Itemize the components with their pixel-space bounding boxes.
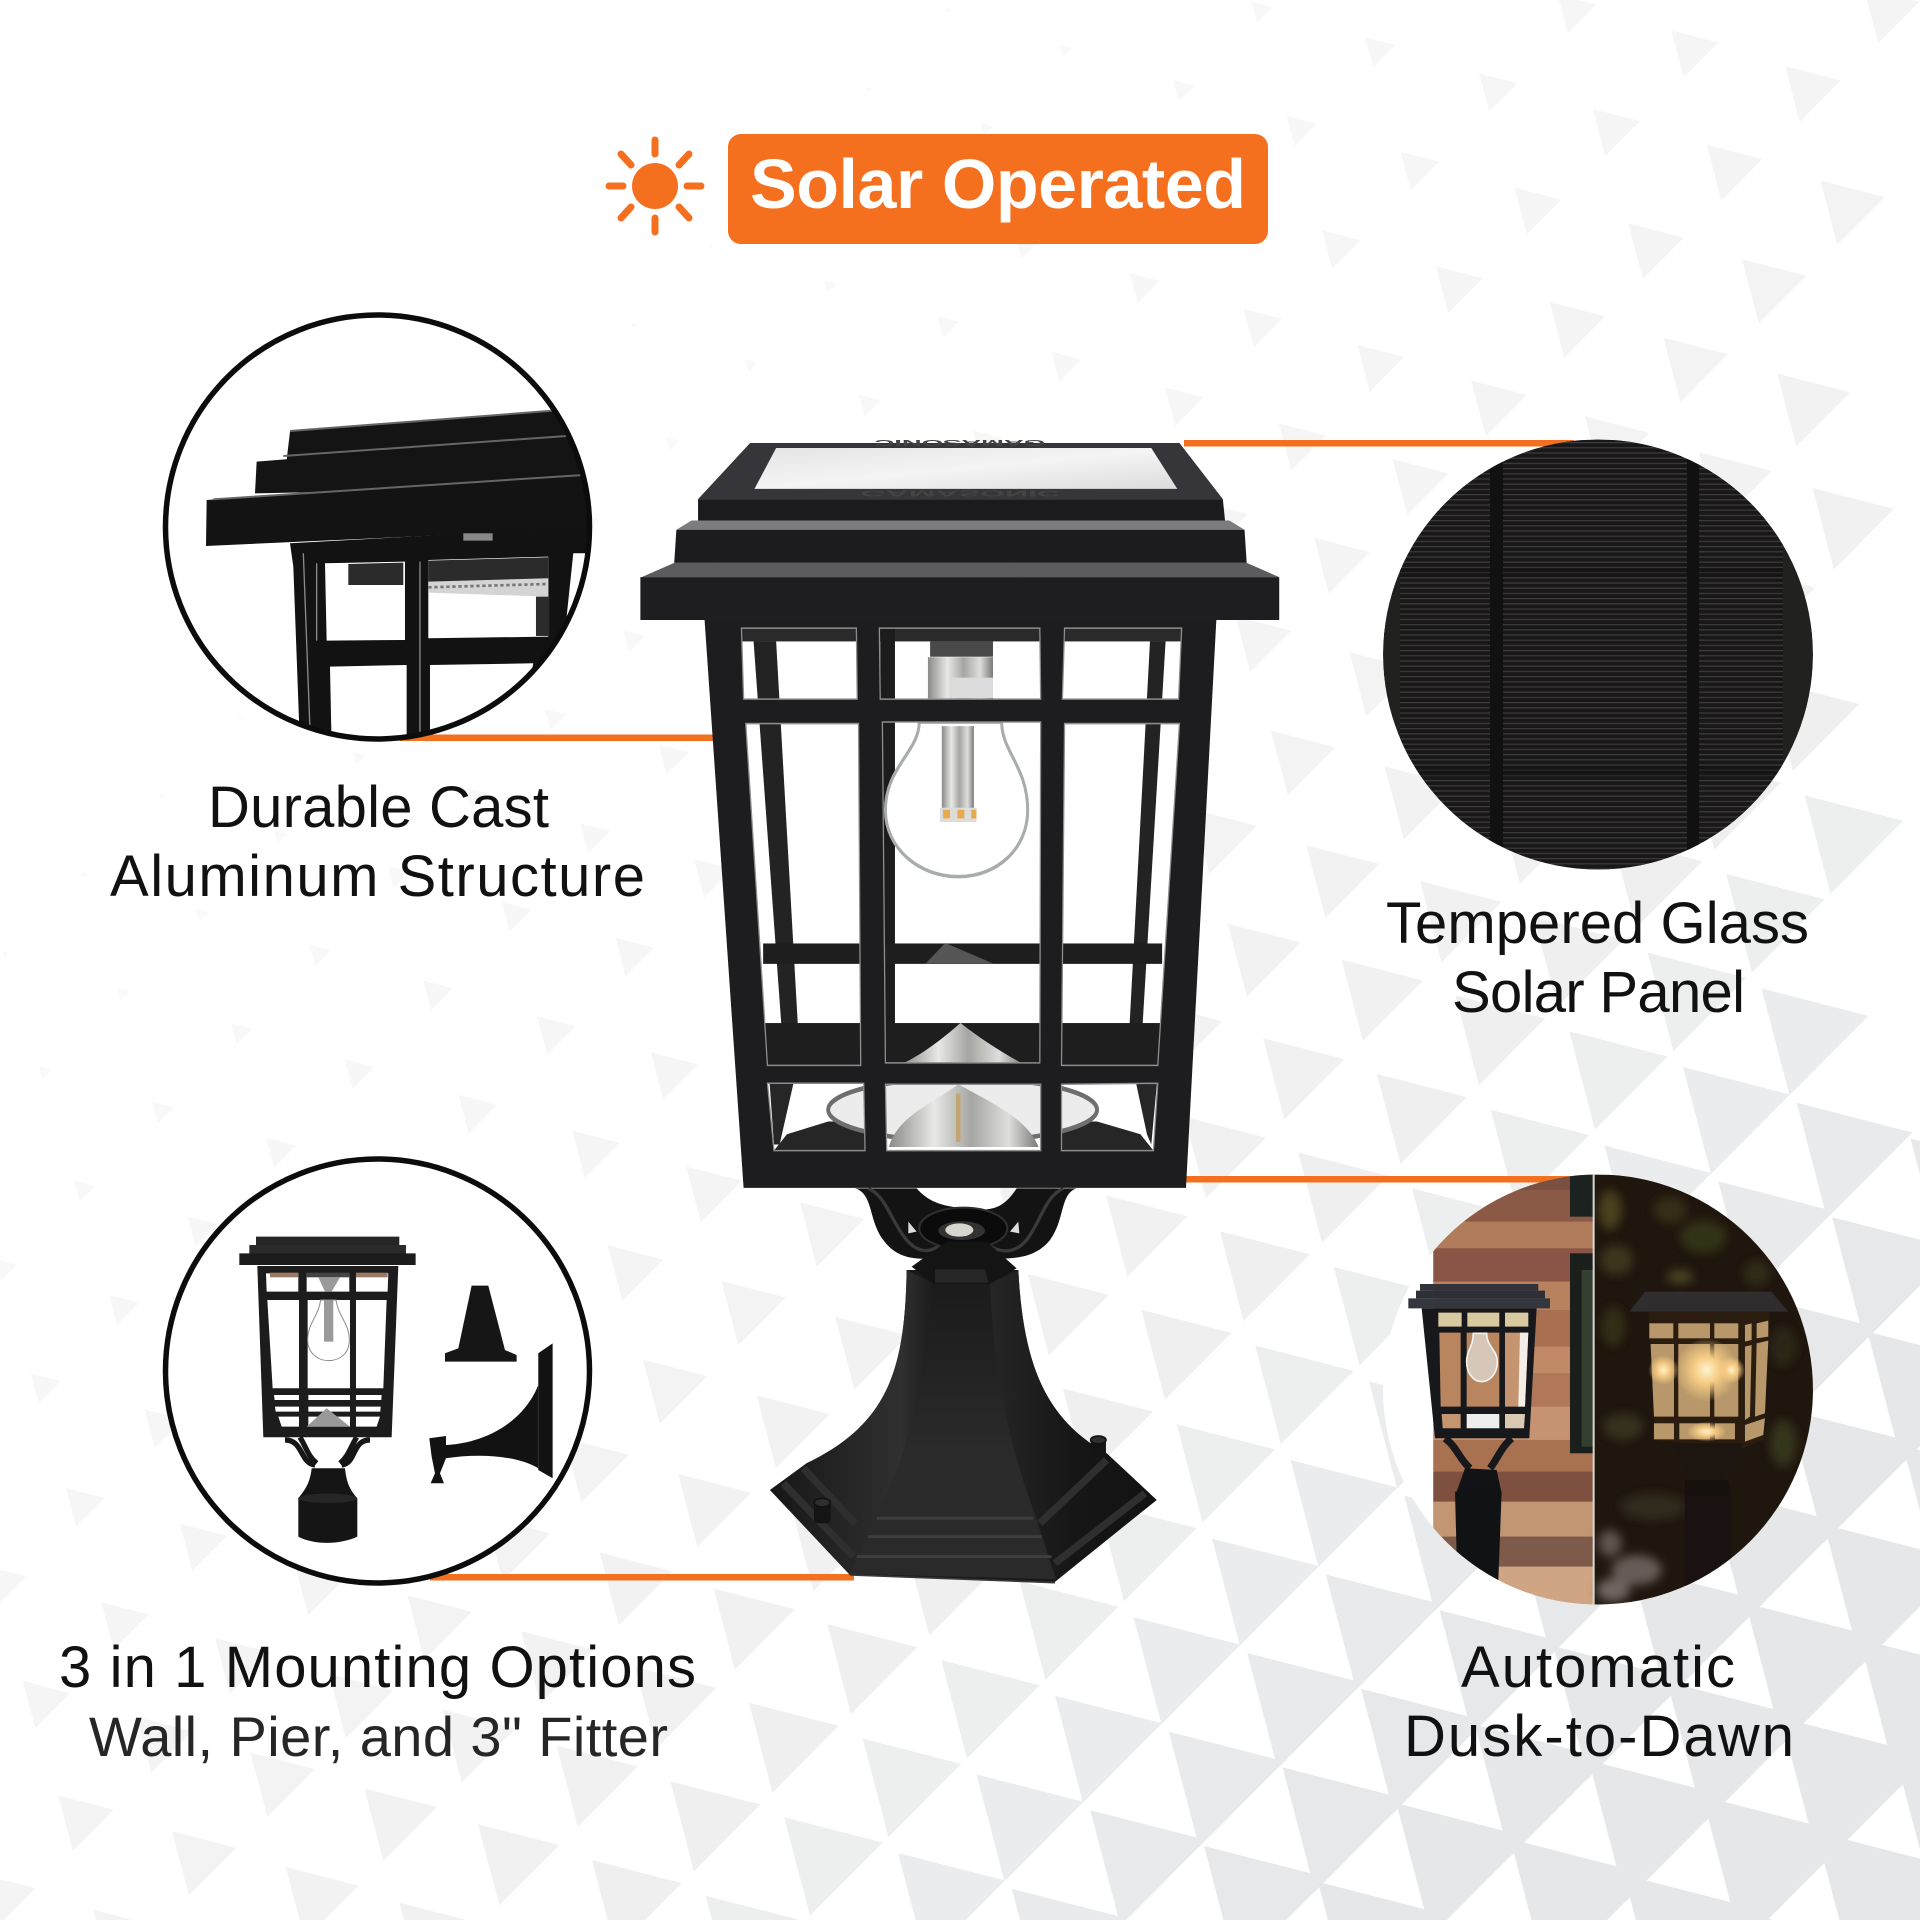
label: 3 in 1 mounting options	[59, 1635, 696, 1768]
interior seen through glass	[741, 628, 1182, 1151]
lantern roof: GAMASONIC	[874, 438, 1045, 447]
icon: sun	[609, 140, 701, 232]
wall mount	[429, 1343, 553, 1483]
solar cell lines	[1400, 440, 1783, 870]
pedestal column and base	[770, 1242, 1157, 1583]
main product: lantern head	[640, 438, 1279, 1188]
label: durable cast aluminum structure: Aluminum Structure	[110, 844, 645, 909]
label: tempered glass solar panel: Solar Panel	[1452, 960, 1745, 1025]
panel: 3 in 1 mounting options	[166, 1159, 590, 1583]
pane highlights	[741, 628, 1182, 1151]
closeup of roof and frame	[206, 410, 593, 747]
label: 3 in 1 mounting options: 3 in 1 Mounting Options	[59, 1635, 696, 1700]
daytime lantern	[1408, 1284, 1550, 1581]
panel: automatic dusk-to-dawn photo	[1383, 1175, 1813, 1605]
divider line	[1593, 1175, 1595, 1605]
label: tempered glass solar panel	[1386, 891, 1809, 1025]
panel: durable cast aluminum detail	[166, 315, 593, 747]
label: automatic dusk-to-dawn: Dusk-to-Dawn	[1404, 1704, 1794, 1769]
lantern roof: GAMASONIC	[861, 489, 1060, 498]
label: tempered glass solar panel: Tempered Glass	[1386, 891, 1809, 956]
orange pill heading: Solar Operated	[750, 145, 1246, 223]
light bulb	[885, 641, 1028, 877]
connector lines	[400, 440, 1574, 1580]
label: 3 in 1 mounting options: Wall, Pier, and 3" Fitter	[89, 1705, 668, 1768]
orange pill heading	[728, 134, 1268, 244]
daytime wood wall	[1433, 1175, 1593, 1605]
label: automatic dusk-to-dawn: Automatic	[1461, 1635, 1735, 1700]
pier mount	[445, 1286, 517, 1362]
label: automatic dusk-to-dawn	[1404, 1635, 1794, 1769]
glass panes	[741, 628, 1182, 1151]
main product: pedestal	[770, 1188, 1157, 1583]
lantern roof	[640, 438, 1279, 620]
title: solar operated badge	[609, 134, 1268, 244]
panel: tempered glass solar panel detail	[1383, 440, 1813, 870]
mounting arms	[855, 1188, 1077, 1259]
dusk foliage background	[1593, 1175, 1813, 1605]
label: durable cast aluminum structure	[110, 775, 645, 909]
label: durable cast aluminum structure: Durable Cast	[208, 775, 549, 840]
lantern frame	[705, 620, 1216, 1188]
bus bars	[1400, 440, 1783, 870]
mini lantern with fitter	[239, 1237, 416, 1543]
lit lantern at dusk	[1629, 1292, 1788, 1587]
